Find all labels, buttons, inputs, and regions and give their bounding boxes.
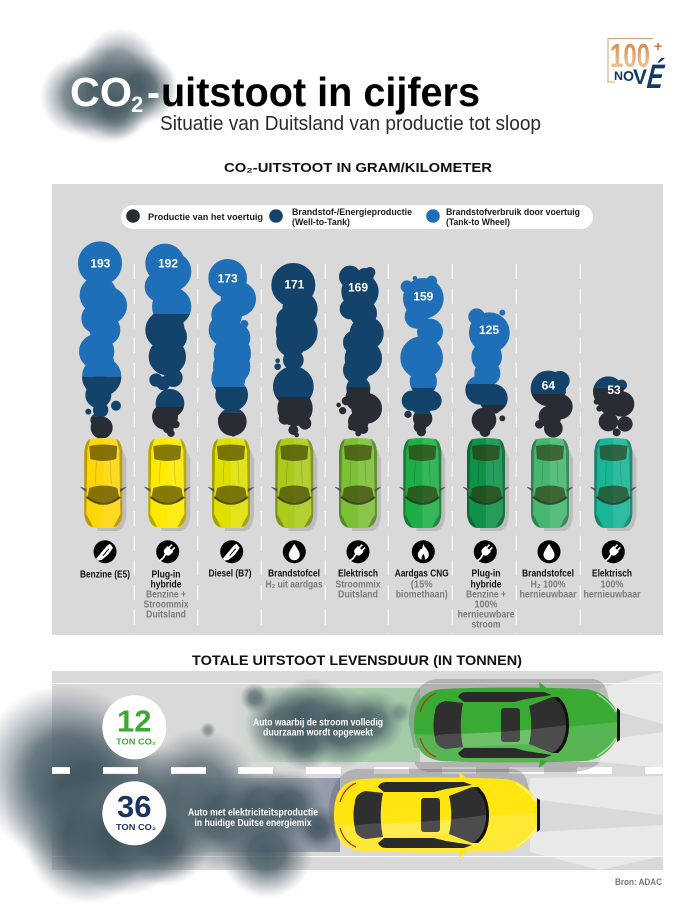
caption: green car: duurzaam wordt opgewekt xyxy=(263,727,373,739)
labels: elektrisch hernieuwbaar xyxy=(584,568,640,600)
title: 2 xyxy=(131,92,143,117)
legend: (Well-to-Tank) xyxy=(292,217,350,228)
title: CO xyxy=(70,69,132,115)
badge: 12 ton CO2: 12 xyxy=(117,704,152,738)
labels: aardgas CNG xyxy=(395,568,449,600)
smoke column 171 xyxy=(272,264,317,436)
labels: elektrisch stroommix: Elektrisch xyxy=(338,568,378,580)
caption: green car: Auto waarbij de stroom volledig xyxy=(253,717,383,729)
title smoke cloud xyxy=(40,28,178,144)
labels: plug-in hybride hernieuwbaar: Benzine + xyxy=(466,588,506,600)
legend: Brandstof-/Energieproductie xyxy=(292,207,412,218)
exhaust trails xyxy=(185,688,420,852)
labels: plug-in hybride Duitsland xyxy=(144,568,189,620)
legend: Productie van het voertuig xyxy=(148,212,263,223)
legend: Brandstofverbruik door voertuig xyxy=(446,207,580,218)
source: Bron: ADAC xyxy=(615,877,662,887)
labels: plug-in hybride hernieuwbaar: Plug-in xyxy=(472,568,500,580)
labels: diesel: Diesel (B7) xyxy=(208,568,252,580)
logo: 100+ Nové: O xyxy=(623,68,634,85)
logo: 100+ Nové: + xyxy=(654,38,662,54)
badge: 36 ton CO2: 36 xyxy=(117,789,152,824)
labels: brandstofcel aardgas: Brandstofcel xyxy=(268,568,320,580)
smoke column 193: 193 xyxy=(90,257,111,271)
smoke column 125 xyxy=(466,309,509,436)
smoke column 193 xyxy=(79,242,126,438)
smoke column 171: 171 xyxy=(284,278,305,292)
smoke column 159: 159 xyxy=(413,290,434,304)
large smoke cloud: 36 ton xyxy=(0,684,342,904)
badge: 36 ton CO2: TON CO₂ xyxy=(116,822,156,832)
column separators xyxy=(134,264,580,644)
labels: plug-in hybride hernieuwbaar: stroom xyxy=(472,618,500,630)
logo: 100+ Nové xyxy=(608,37,669,96)
yellow car xyxy=(329,769,540,858)
caption: yellow car: Auto met elektriciteitsproductie xyxy=(188,807,318,819)
smoke column 173 xyxy=(209,260,255,436)
smoke column 159 xyxy=(401,277,443,435)
labels: brandstofcel hernieuwbaar: Brandstofcel xyxy=(522,568,574,580)
smoke columns, right group xyxy=(401,277,633,437)
labels: brandstofcel hernieuwbaar xyxy=(520,568,576,600)
smoke column 192 xyxy=(146,245,190,436)
labels: brandstofcel hernieuwbaar: hernieuwbaar xyxy=(520,588,576,600)
smoke column 173: 173 xyxy=(218,272,238,286)
badge: 12 ton CO2 xyxy=(102,695,166,759)
smoke column 169: 169 xyxy=(348,281,368,295)
heading: CO2 per kilometer: CO₂-UITSTOOT IN GRAM/KILOMETER xyxy=(224,160,493,175)
smoke column 53: 53 xyxy=(607,383,621,397)
labels: plug-in hybride Duitsland: hybride xyxy=(150,578,182,590)
labels: plug-in hybride hernieuwbaar: hybride xyxy=(470,578,502,590)
labels: elektrisch hernieuwbaar: hernieuwbaar xyxy=(584,588,640,600)
panel: road xyxy=(47,671,663,870)
panel: grams per kilometer xyxy=(52,184,663,635)
labels: elektrisch stroommix: Duitsland xyxy=(338,588,378,600)
badge: 36 ton CO2 xyxy=(102,781,166,845)
logo: 100+ Nové: V xyxy=(633,66,647,89)
logo: 100+ Nové: 100 xyxy=(610,37,650,74)
labels: aardgas CNG: biomethaan) xyxy=(396,588,448,600)
smoke column 64 xyxy=(532,372,572,437)
labels: brandstofcel hernieuwbaar: H₂ 100% xyxy=(530,578,566,590)
road centre dashes xyxy=(52,767,663,774)
caption: yellow car: in huidige Duitse energiemix xyxy=(194,817,312,829)
labels: elektrisch stroommix xyxy=(336,568,381,600)
labels: plug-in hybride Duitsland: Duitsland xyxy=(146,608,186,620)
heading: lifetime emissions: TOTALE UITSTOOT LEVENSDUUR (IN TONNEN) xyxy=(192,653,522,668)
smoke column 64: 64 xyxy=(542,379,555,393)
logo: 100+ Nové: N xyxy=(614,69,623,83)
subtitle: Situatie van Duitsland van productie tot sloop xyxy=(160,113,541,135)
labels: plug-in hybride Duitsland: Benzine + xyxy=(146,588,186,600)
badge: 12 ton CO2: TON CO₂ xyxy=(116,736,156,746)
labels: plug-in hybride Duitsland: Plug-in xyxy=(152,568,180,580)
title: uitstoot in cijfers xyxy=(161,69,480,115)
smoke column 125: 125 xyxy=(479,323,499,337)
labels: plug-in hybride Duitsland: Stroommix xyxy=(144,598,189,610)
smoke column 169 xyxy=(337,267,383,435)
labels: benzine: Benzine (E5) xyxy=(80,568,130,580)
green car xyxy=(409,679,620,772)
title: - xyxy=(147,69,160,115)
smoke column 192: 192 xyxy=(158,257,178,271)
smoke column 53 xyxy=(594,377,633,435)
legend: (Tank-to Wheel) xyxy=(446,217,510,228)
legend xyxy=(121,205,593,229)
labels: elektrisch hernieuwbaar: 100% xyxy=(600,578,624,590)
labels: plug-in hybride hernieuwbaar: 100% xyxy=(474,598,498,610)
labels: aardgas CNG: Aardgas CNG xyxy=(395,568,449,580)
labels: elektrisch hernieuwbaar: Elektrisch xyxy=(592,568,632,580)
caption: yellow car xyxy=(188,807,318,829)
labels: brandstofcel aardgas xyxy=(266,568,323,590)
labels: aardgas CNG: (15% xyxy=(411,578,433,590)
fuel type icons xyxy=(94,540,625,563)
smoke columns, left group xyxy=(79,242,383,438)
small cars row xyxy=(80,438,636,531)
labels: elektrisch stroommix: Stroommix xyxy=(336,578,381,590)
labels: plug-in hybride hernieuwbaar: hernieuwbare xyxy=(458,608,515,620)
labels: plug-in hybride hernieuwbaar xyxy=(458,568,515,630)
caption: green car xyxy=(253,717,383,739)
small smoke cloud: 12 ton xyxy=(240,678,412,771)
labels: brandstofcel aardgas: H₂ uit aardgas xyxy=(266,578,323,590)
logo: 100+ Nové: É xyxy=(643,56,669,96)
